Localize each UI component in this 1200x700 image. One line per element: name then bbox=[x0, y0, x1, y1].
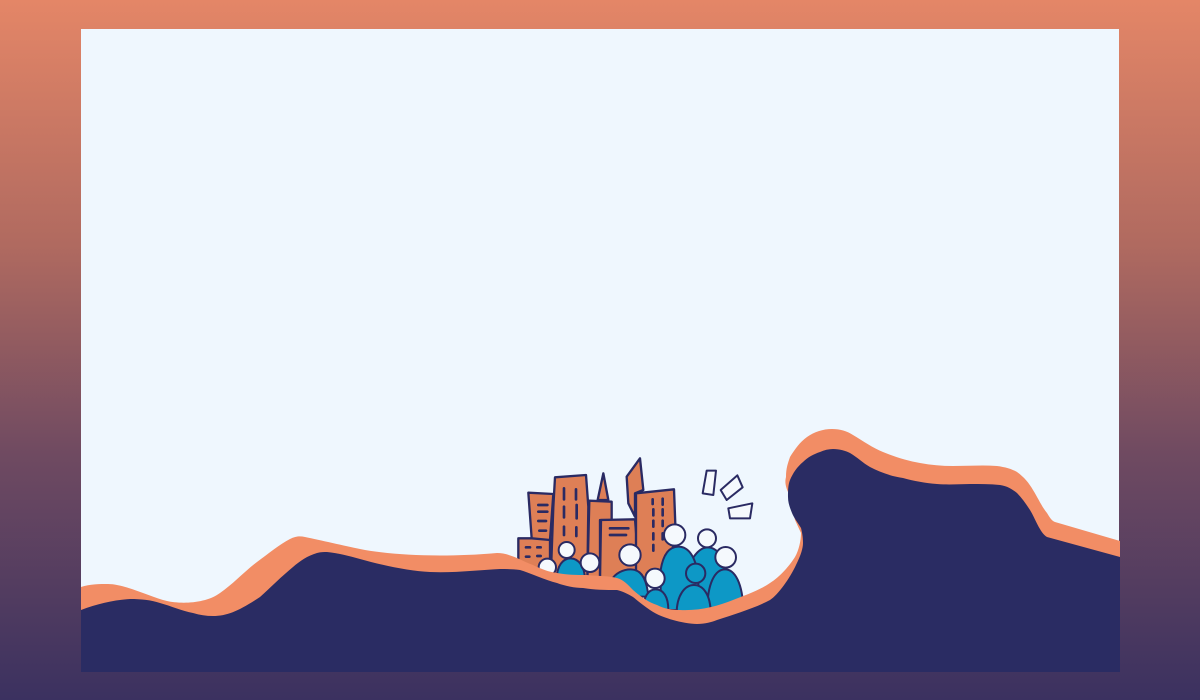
buildings bbox=[518, 458, 676, 580]
crowd of people bbox=[539, 524, 743, 613]
windows bbox=[526, 488, 663, 557]
panel: light sky bbox=[81, 29, 1119, 672]
orange wave bbox=[81, 429, 1120, 672]
navy wave bbox=[81, 449, 1120, 672]
person heads bbox=[539, 524, 736, 588]
person bodies bbox=[557, 558, 585, 580]
illustration: city and crowd bbox=[518, 458, 752, 613]
flying debris bbox=[703, 471, 752, 518]
